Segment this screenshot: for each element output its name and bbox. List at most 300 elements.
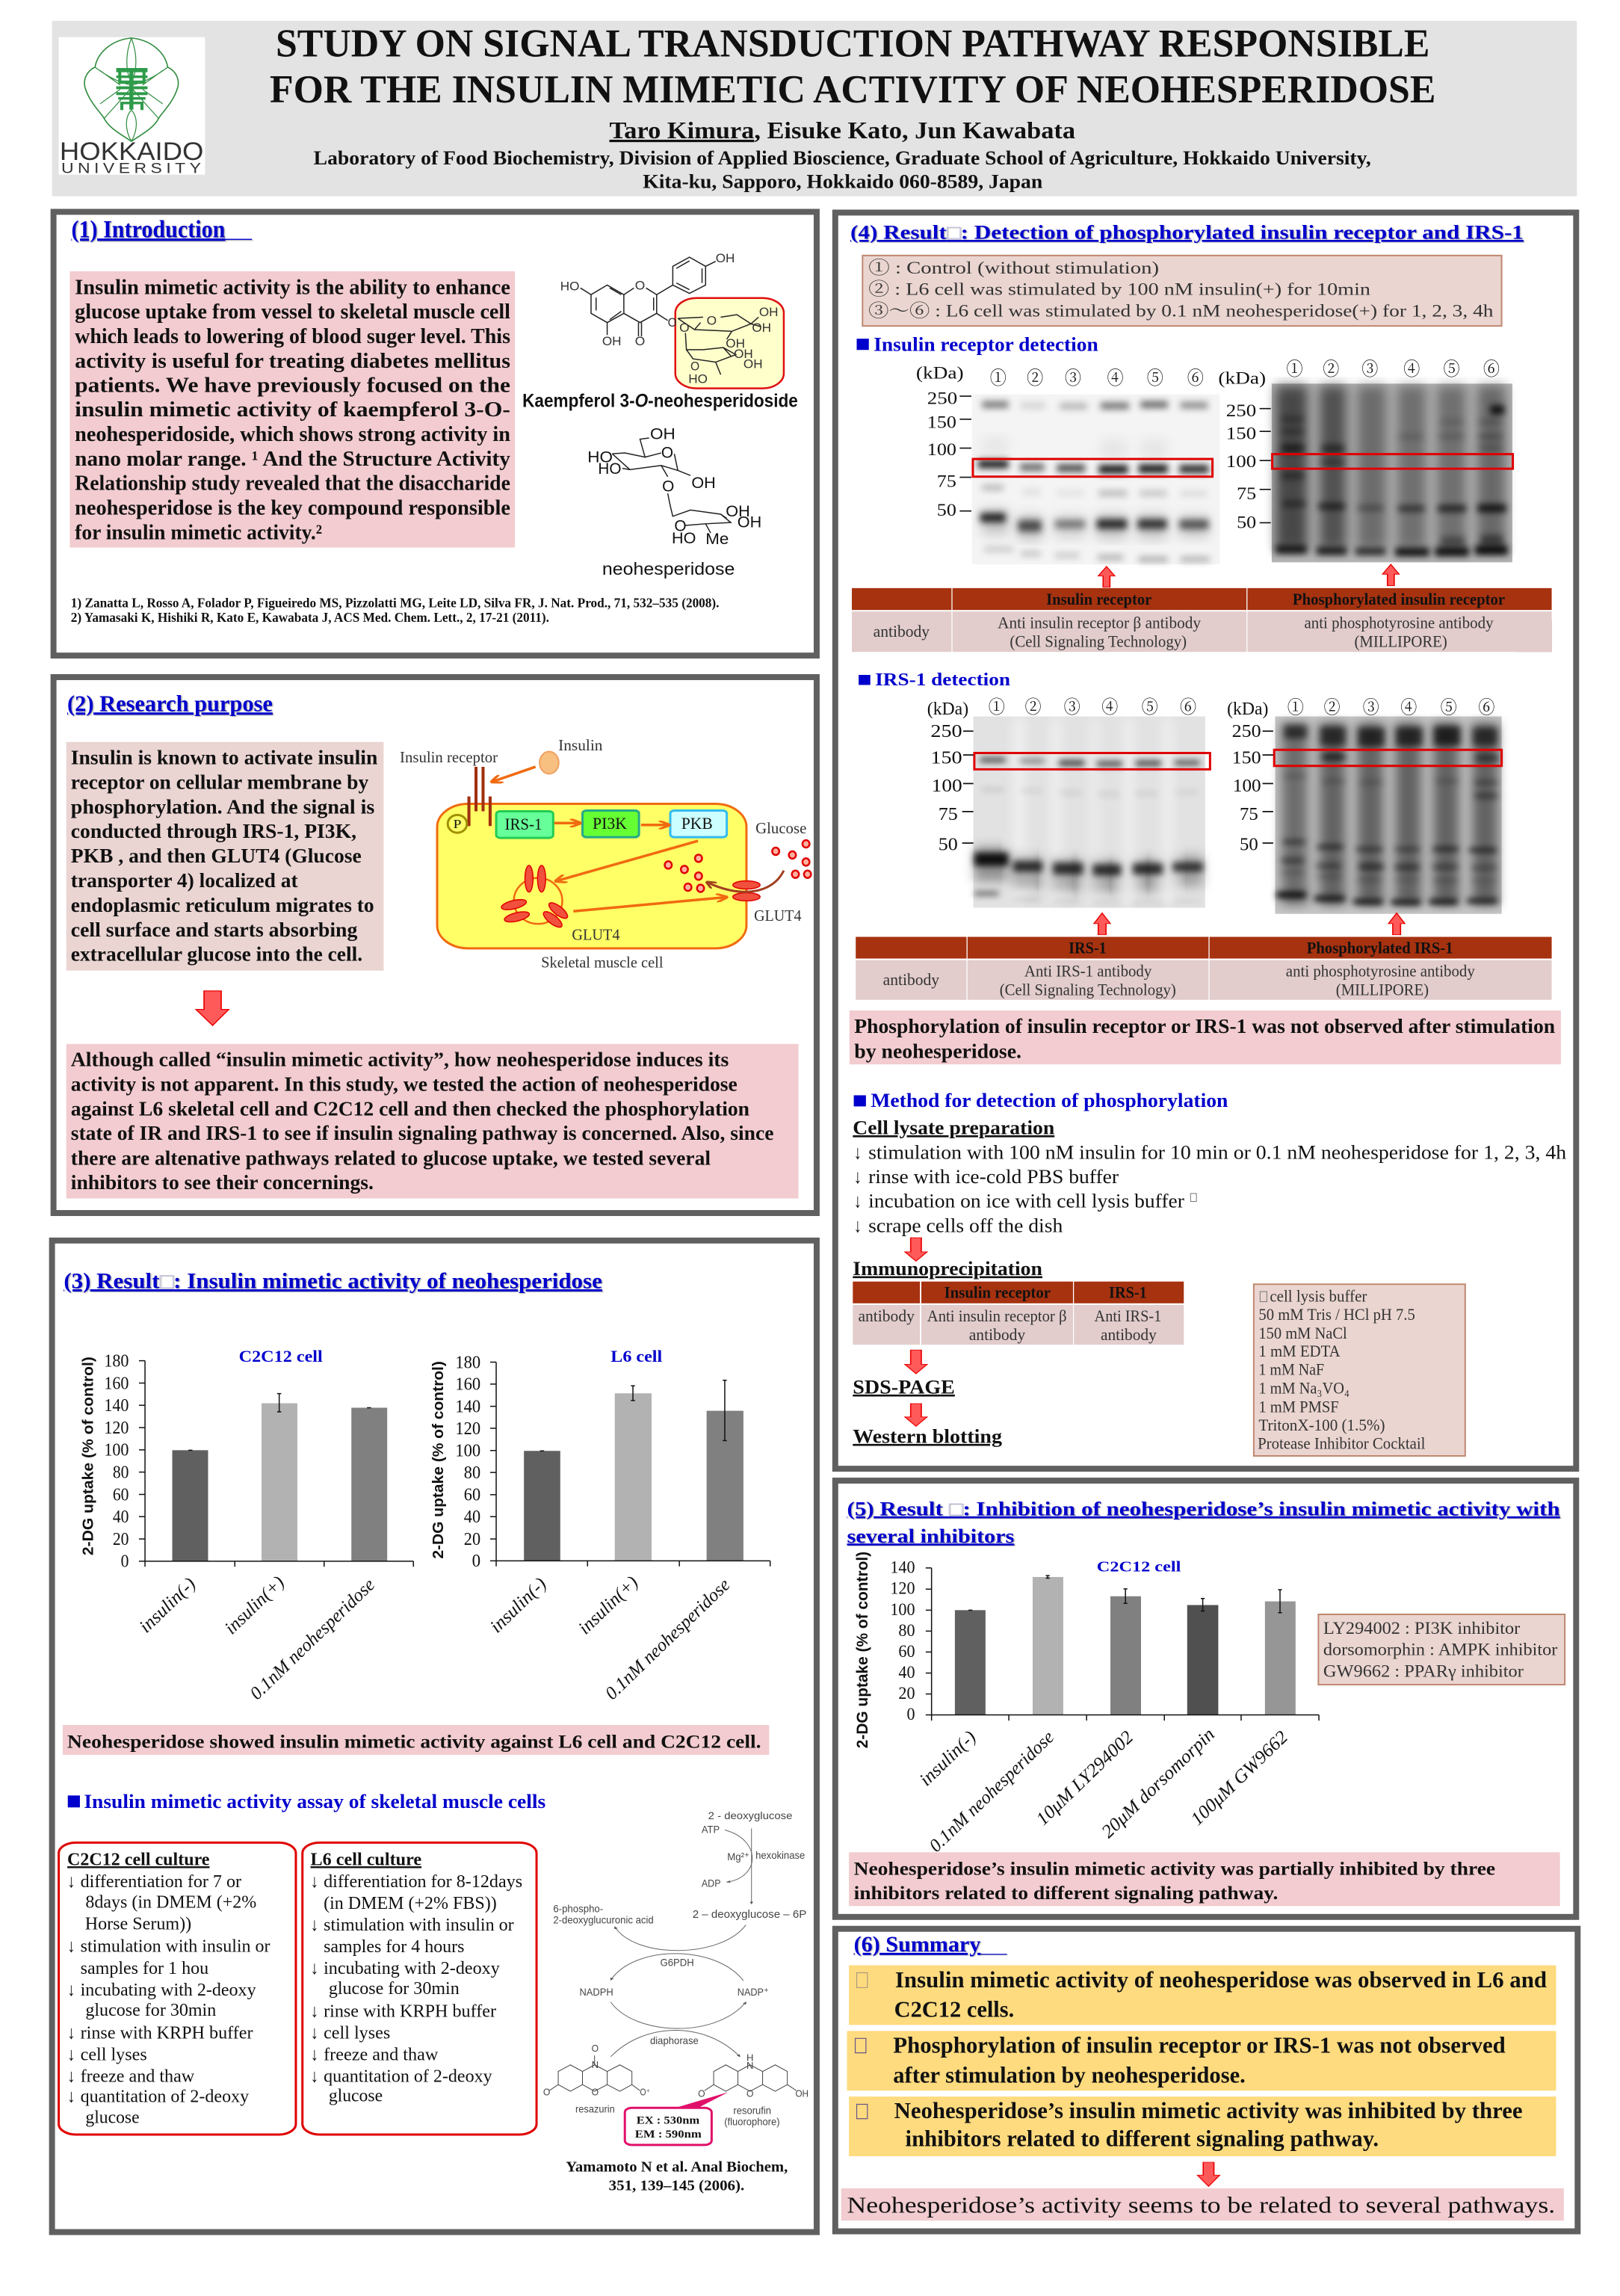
western blot: IRS-1: ② [1025,697,1042,717]
diagram: insulin signalling in skeletal muscle cell: PKB [681,815,713,833]
callout: cell lysis buffer recipe: cell lysis buffer [1270,1287,1367,1306]
western blot: IRS-1: 50 [939,834,958,854]
table: immunoprecipitation antibodies: Anti IRS-1 [1095,1307,1161,1325]
logo: Hokkaido University [59,37,205,176]
diagram: 2-DG assay enzyme cycle: 2 – deoxyglucose – 6P [693,1908,806,1921]
protocol: L6 cell culture: glucose for 30min [329,1978,460,1999]
callout: inhibitor key [1318,1614,1565,1685]
bar chart: inhibitors in C2C12 cell: 0 [906,1705,915,1723]
arrow: to conclusion [1197,2162,1219,2186]
heading: immunoprecipitation: Immunoprecipitation [853,1258,1042,1280]
arrow: up to insulin receptor column [1098,567,1115,587]
protocol: cell lysate preparation: scrape cells off the dish [868,1215,1063,1236]
bar chart: L6 cell: 2-DG uptake (% of control) [429,1361,447,1559]
table: immunoprecipitation antibodies [853,1282,1184,1345]
bar chart: C2C12 cell [79,1347,413,1704]
callout: cell lysis buffer recipe: 1 mM NaF [1258,1361,1324,1379]
text block: study aim: there are altenative pathways related to glucose uptake, we tested several [71,1147,711,1170]
text block: insulin signalling: PKB , and then GLUT4 (Glucose [71,845,362,868]
text block: insulin signalling: transporter 4) localized at [71,869,298,892]
bar chart: inhibitors in C2C12 cell: 2-DG uptake (% of control) [853,1552,871,1748]
western blot: phosphorylated IRS-1: 150 [1232,747,1261,768]
text block: study aim: against L6 skeletal cell and C2C12 cell and then checked the phosphorylation [71,1097,749,1120]
text block: introduction: glucose uptake from vessel to skeletal muscle cell [75,299,510,323]
diagram: insulin signalling in skeletal muscle cell: GLUT4 [754,908,802,925]
bar chart: C2C12 cell: 20 [113,1529,129,1549]
western blot: insulin receptor [916,362,1219,564]
protocol: C2C12 cell culture: samples for 1 hou [81,1958,208,1978]
arrow: down [196,991,229,1025]
western blot: IRS-1: (kDa) [927,698,968,719]
table: IRS-1 antibodies: Phosphorylated IRS-1 [1307,939,1453,957]
western blot: IRS-1: 250 [930,721,962,741]
chemical structure: neohesperidose: HO [672,529,696,547]
western blot: insulin receptor: 250 [927,389,957,408]
text block: introduction: neohesperidoside, which shows strong activity in [75,422,510,445]
bar chart: L6 cell: 160 [455,1374,480,1394]
western blot: phosphorylated insulin receptor: ① [1286,359,1303,380]
subheading: IRS-1 detection [859,669,1010,690]
bar chart: C2C12 cell: C2C12 cell [239,1347,323,1365]
callout: cell lysis buffer recipe: 1 mM Na₃VO₄ [1258,1380,1350,1398]
western blot: insulin receptor: (kDa) [916,362,964,383]
diagram: 2-DG assay enzyme cycle: diaphorase [650,2035,699,2047]
protocol: L6 cell culture: glucose [329,2086,383,2105]
western blot: phosphorylated IRS-1: 250 [1232,721,1261,741]
conclusion: result 3 [849,1852,1560,1906]
title: FOR THE INSULIN MIMETIC ACTIVITY OF NEOHESPERIDOSE [270,68,1435,111]
bar chart: inhibitors in C2C12 cell: 40 [898,1663,915,1682]
protocol: L6 cell culture: incubating with 2-deoxy [324,1958,500,1978]
western blot: phosphorylated IRS-1: ④ [1400,697,1417,718]
western blot: phosphorylated insulin receptor: ⑥ [1483,359,1500,380]
protocol: L6 cell culture: stimulation with insulin or [324,1915,514,1935]
bar chart: C2C12 cell: insulin(-) [135,1574,200,1637]
text block: study aim: state of IR and IRS-1 to see if insulin signaling pathway is concerned. Also, since [71,1122,773,1145]
bar chart: inhibitors in C2C12 cell: 80 [898,1621,915,1640]
western blot: insulin receptor: 50 [937,500,956,519]
western blot: phosphorylated insulin receptor: 150 [1226,424,1256,443]
callout: excitation and emission: EM : 590nm [635,2129,702,2141]
heading: SDS-PAGE: SDS-PAGE [853,1376,955,1398]
protocol: L6 cell culture: quantitation of 2-deoxy [324,2067,492,2086]
diagram: 2-DG assay enzyme cycle: H [746,2053,753,2064]
chemical structure: neohesperidose [587,425,761,548]
diagram: 2-DG assay enzyme cycle: O [592,2087,599,2097]
chemical structure: neohesperidose: OH [738,513,761,531]
panel: result 2 phosphorylation detection [835,212,1576,1469]
protocol: cell lysate preparation: rinse with ice-cold PBS buffer [868,1166,1119,1188]
bar chart: C2C12 cell: 0.1nM neohesperidose [247,1575,379,1704]
affiliation [314,146,1371,193]
protocol: C2C12 cell culture: ↓ [67,1980,75,2000]
western blot: phosphorylated insulin receptor: ④ [1403,359,1420,380]
text block: introduction: for insulin mimetic activity.² [75,519,322,544]
heading: assay [68,1791,545,1812]
table: IRS-1 antibodies: (Cell Signaling Technology) [1000,981,1176,999]
western blot: IRS-1: ⑤ [1142,697,1158,717]
conclusion: result 3: inhibitors related to different signaling pathway. [854,1882,1278,1904]
bar chart: L6 cell [429,1347,770,1704]
text block: introduction: Relationship study revealed that the disaccharide [75,471,510,495]
callout: cell lysis buffer recipe: Protease Inhibitor Cocktail [1258,1434,1425,1453]
chemical structure: kaempferol 3-O-neohesperidoside: O [668,315,677,330]
western blot: IRS-1: 150 [930,747,962,768]
protocol: L6 cell culture: ↓ [311,2045,318,2064]
western blot: IRS-1: ③ [1064,697,1080,717]
diagram: 2-DG assay enzyme cycle: Mg²⁺ [727,1851,749,1863]
bar chart: L6 cell: 0 [472,1552,480,1571]
conclusion: result 2 [850,1010,1561,1064]
diagram: 2-DG assay enzyme cycle: NADPH [579,1987,613,1999]
protocol: C2C12 cell culture: freeze and thaw [81,2067,195,2086]
callout: cell lysis buffer recipe: 150 mM NaCl [1258,1324,1347,1342]
diagram: 2-DG assay enzyme cycle: 6-phospho- [553,1904,603,1915]
protocol: C2C12 cell culture: ↓ [67,2023,75,2043]
diagram: 2-DG assay enzyme cycle: ATP [702,1824,720,1836]
panel: research purpose [54,677,817,1213]
diagram: insulin signalling in skeletal muscle cell: Insulin [558,738,603,754]
bar chart: L6 cell: 60 [464,1485,480,1505]
protocol: L6 cell culture: cell lyses [324,2023,390,2043]
text block: introduction: patients. We have previously focused on the [75,373,510,397]
logo: Hokkaido University: UNIVERSITY [61,161,201,176]
text block: introduction: which leads to lowering of blood suger level. This [75,324,510,348]
text block: insulin signalling: conducted through IRS-1, PI3K, [71,820,356,843]
bar chart: L6 cell: 180 [455,1353,480,1372]
bar chart: inhibitors in C2C12 cell: 0.1nM neohesperidose [925,1727,1058,1857]
conclusion: result 2: by neohesperidose. [854,1040,1021,1062]
protocol: C2C12 cell culture: glucose [85,2108,140,2127]
authors: Taro Kimura , Eisuke Kato, Jun Kawabata [609,117,1075,144]
chemical structure: kaempferol 3-O-neohesperidoside: OH [602,334,621,348]
bar chart: L6 cell: 20 [464,1529,480,1549]
text block: study aim: Although called “insulin mimetic activity”, how neohesperidose induces its [71,1048,729,1071]
diagram: insulin signalling in skeletal muscle cell: P [454,818,461,831]
diagram: 2-DG assay enzyme cycle: O [543,2087,550,2097]
diagram: 2-DG assay enzyme cycle: hexokinase [755,1850,805,1862]
protocol: L6 cell culture: (in DMEM (+2% FBS)) [324,1893,497,1913]
arrow: up to phosphorylated IRS-1 column [1388,913,1405,935]
callout: excitation and emission: EX : 530nm [637,2114,699,2126]
western blot: insulin receptor: ⑥ [1187,368,1204,389]
western blot: phosphorylated insulin receptor: ③ [1361,359,1378,380]
bar chart: inhibitors in C2C12 cell: insulin(-) [916,1727,980,1790]
diagram: insulin signalling in skeletal muscle cell: PI3K [593,815,627,833]
heading: introduction: (1) Introduction [71,216,225,243]
diagram: 2-DG assay enzyme cycle: G6PDH [660,1957,694,1969]
affiliation: Kita-ku, Sapporo, Hokkaido 060-8589, Japan [643,170,1042,193]
chemical structure: kaempferol 3-O-neohesperidoside: O [635,334,645,348]
legend: sample conditions: ① : Control (without stimulation) [868,258,1159,277]
chemical structure: kaempferol 3-O-neohesperidoside: HO [560,279,579,293]
title: STUDY ON SIGNAL TRANSDUCTION PATHWAY RESPONSIBLE [276,22,1429,66]
protocol: C2C12 cell culture: cell lyses [81,2045,147,2064]
western blot: phosphorylated IRS-1: 100 [1233,775,1261,795]
citation: Yamamoto N et al. Anal Biochem, [566,2158,788,2175]
table: immunoprecipitation antibodies: antibody [969,1326,1026,1344]
western blot: phosphorylated IRS-1: ③ [1363,697,1379,718]
heading: result 3 [847,1499,1560,1547]
bar chart: L6 cell: L6 cell [610,1347,662,1365]
bar chart: L6 cell: 40 [464,1507,480,1527]
western blot: phosphorylated IRS-1 [1227,697,1502,914]
western blot: phosphorylated insulin receptor: 250 [1226,401,1256,420]
bar chart: inhibitors in C2C12 cell: 60 [898,1642,915,1661]
bar chart: C2C12 cell: 2-DG uptake (% of control) [79,1357,96,1555]
heading: western blotting: Western blotting [853,1426,1002,1448]
callout: excitation and emission [625,2092,729,2145]
panel: result 3 inhibitors [835,1481,1576,1917]
subheading: IRS-1 detection: IRS-1 detection [875,669,1010,690]
text block: introduction: activity is useful for treating diabetes mellitus [75,348,510,372]
protocol: cell lysate preparation: ↓ [854,1166,862,1188]
table: insulin receptor antibodies: Anti insulin receptor β antibody [998,614,1201,632]
bar chart: C2C12 cell: 120 [104,1418,129,1437]
protocol: C2C12 cell culture: ↓ [67,2067,75,2086]
protocol: L6 cell culture: differentiation for 8-12days [324,1871,522,1892]
bar chart: L6 cell: 100 [455,1441,480,1460]
text block: insulin signalling: endoplasmic reticulum migrates to [71,894,374,916]
callout: cell lysis buffer recipe [1254,1284,1465,1456]
protocol: C2C12 cell culture: glucose for 30min [85,2000,216,2020]
text block: insulin signalling: Insulin is known to activate insulin [71,746,377,769]
bar chart: C2C12 cell: 80 [113,1463,129,1482]
affiliation: Laboratory of Food Biochemistry, Division of Applied Bioscience, Graduate School of Agriculture, Hokkaido University, [314,146,1371,169]
citation: 351, 139–145 (2006). [609,2176,744,2194]
table: immunoprecipitation antibodies: IRS-1 [1109,1284,1147,1302]
western blot: phosphorylated IRS-1: ② [1324,697,1341,718]
legend: sample conditions: ② : L6 cell was stimulated by 100 nM insulin(+) for 10min [868,280,1370,299]
heading: result 3: several inhibitors [847,1525,1014,1547]
western blot: phosphorylated insulin receptor: ② [1323,359,1339,380]
text block: study aim: inhibitors to see their concernings. [71,1171,374,1194]
diagram: 2-DG assay enzyme cycle: O [746,2088,753,2099]
subheading: insulin receptor detection: Insulin receptor detection [874,333,1098,355]
title [270,22,1435,111]
callout: cell lysis buffer recipe: TritonX-100 (1.5%) [1258,1416,1385,1435]
bar chart: inhibitors in C2C12 cell: 20 [898,1684,915,1703]
diagram: 2-DG assay enzyme cycle: resorufin [733,2105,771,2117]
bar chart: C2C12 cell: insulin(+) [221,1573,288,1638]
table: insulin receptor antibodies [852,588,1552,652]
chemical structure: kaempferol 3-O-neohesperidoside: O [690,359,699,373]
diagram: 2-DG assay enzyme cycle: OH [795,2088,809,2099]
bar chart: inhibitors in C2C12 cell: 140 [890,1558,915,1576]
diagram: 2-DG assay enzyme cycle: 2 - deoxyglucose [708,1810,792,1822]
panel: introduction [54,212,817,655]
western blot: phosphorylated insulin receptor: ⑤ [1444,359,1460,380]
table: insulin receptor antibodies: antibody [874,623,930,641]
protocol: L6 cell culture: samples for 4 hours [324,1937,464,1957]
text block: study aim: activity is not apparent. In this study, we tested the action of neohesperidose [71,1073,738,1096]
chemical structure: neohesperidose: OH [691,474,716,491]
summary point 1: C2C12 cells. [894,1997,1014,2022]
bar chart: L6 cell: 140 [455,1397,480,1416]
protocol: C2C12 cell culture: 8days (in DMEM (+2% [85,1892,256,1912]
diagram: 2-DG assay enzyme cycle: resazurin [575,2104,615,2115]
table: insulin receptor antibodies: Insulin receptor [1046,590,1151,608]
western blot: IRS-1: ⑥ [1180,697,1196,717]
summary point 2 [847,2031,1556,2090]
bar chart: C2C12 cell: 160 [104,1374,129,1393]
protocol: cell lysate preparation: ↓ [854,1141,862,1163]
protocol: C2C12 cell culture: Horse Serum)) [85,1913,191,1934]
bar chart: L6 cell: insulin(+) [575,1573,642,1638]
western blot: phosphorylated insulin receptor [1218,359,1513,562]
diagram: insulin signalling in skeletal muscle cell: Skeletal muscle cell [541,954,664,972]
diagram: insulin signalling in skeletal muscle cell: IRS-1 [505,815,542,833]
protocol: L6 cell culture: ↓ [311,2023,318,2043]
summary point 1 [849,1966,1556,2025]
summary point 3 [849,2096,1556,2156]
diagram: 2-DG assay enzyme cycle: 2-deoxyglucuronic acid [553,1914,654,1925]
bar chart: inhibitors in C2C12 cell: 20μM dorsomorpin [1098,1724,1219,1842]
chemical structure: neohesperidose: O [662,477,674,495]
callout: cell lysis buffer recipe: 1 mM EDTA [1258,1342,1341,1361]
label: kaempferol: Kaempferol 3-O-neohesperidoside [522,390,798,411]
chemical structure: kaempferol 3-O-neohesperidoside [560,250,784,389]
bar chart: inhibitors in C2C12 cell: 10μM LY294002 [1033,1727,1137,1830]
western blot: IRS-1: ① [989,697,1005,717]
callout: cell lysis buffer recipe: 1 mM PMSF [1258,1398,1339,1416]
chemical structure: neohesperidose: O [661,444,673,461]
table: IRS-1 antibodies: Anti IRS-1 antibody [1024,963,1152,981]
diagram: 2-DG assay enzyme cycle: O⁺ [640,2087,650,2097]
diagram: insulin signalling in skeletal muscle cell: Insulin receptor [400,749,498,766]
chemical structure: neohesperidose: Me [705,530,729,548]
bar chart: L6 cell: 80 [464,1463,480,1482]
subheading: insulin receptor detection [857,333,1098,355]
western blot: phosphorylated IRS-1: 75 [1240,803,1258,824]
bar chart: inhibitors in C2C12 cell: C2C12 cell [1097,1558,1181,1575]
chemical structure: kaempferol 3-O-neohesperidoside: O [679,321,690,334]
western blot: IRS-1: ④ [1101,697,1118,717]
protocol: L6 cell culture: ↓ [311,1958,318,1978]
table: immunoprecipitation antibodies: Anti insulin receptor β [927,1307,1066,1325]
protocol: C2C12 cell culture: rinse with KRPH buffer [81,2023,253,2043]
chemical structure: kaempferol 3-O-neohesperidoside: O [707,313,717,327]
protocol: C2C12 cell culture: incubating with 2-deoxy [81,1980,256,2000]
chemical structure: kaempferol 3-O-neohesperidoside: OH [726,336,745,351]
western blot: phosphorylated IRS-1: 50 [1240,834,1258,854]
western blot: IRS-1 [927,697,1210,908]
bar chart: inhibitors in C2C12 cell: 120 [890,1579,915,1598]
protocol: L6 cell culture: L6 cell culture [311,1850,421,1870]
protocol: L6 cell culture: ↓ [311,1915,318,1935]
protocol: C2C12 cell culture: ↓ [67,1937,75,1956]
diagram: insulin signalling in skeletal muscle cell: GLUT4 [572,927,620,943]
protocol: C2C12 cell culture: ↓ [67,2045,75,2064]
table: IRS-1 antibodies: antibody [883,971,940,989]
references [71,596,719,625]
heading: research purpose: (2) Research purpose [67,691,273,716]
chemical structure: kaempferol 3-O-neohesperidoside: OH [716,250,735,265]
western blot: insulin receptor: 100 [927,439,956,459]
table: immunoprecipitation antibodies: antibody [1101,1326,1157,1344]
text block: introduction: neohesperidose is the key compound responsible [75,495,510,519]
western blot: insulin receptor: ④ [1107,368,1124,389]
chemical structure: kaempferol 3-O-neohesperidoside: O [635,278,645,292]
western blot: insulin receptor: ② [1027,368,1043,389]
western blot: insulin receptor: 75 [937,472,956,491]
diagram: 2-DG assay enzyme cycle: N [746,2061,753,2071]
western blot: phosphorylated insulin receptor: 75 [1237,484,1256,503]
western blot: insulin receptor: ③ [1065,368,1081,389]
protocol: C2C12 cell culture: ↓ [67,2086,75,2106]
chemical structure: neohesperidose: HO [598,460,621,477]
western blot: IRS-1: 75 [939,803,958,824]
western blot: phosphorylated IRS-1: (kDa) [1227,698,1268,719]
legend: sample conditions [862,256,1502,326]
protocol: L6 cell culture: ↓ [311,1871,318,1892]
summary point 2: after stimulation by neohesperidose. [893,2063,1246,2088]
subheading: method [854,1090,1228,1111]
protocol: L6 cell culture [303,1842,537,2135]
protocol: L6 cell culture: freeze and thaw [324,2045,439,2064]
western blot: phosphorylated insulin receptor: (kDa) [1218,368,1266,388]
references: 1) Zanatta L, Rosso A, Folador P, Figueiredo MS, Pizzolatti MG, Leite LD, Silva FR, J. Nat. Prod., 71, 532–535 (2008). [71,596,719,611]
arrow: to SDS-PAGE [905,1350,927,1374]
diagram: 2-DG assay enzyme cycle: ADP [702,1878,721,1889]
bar chart: C2C12 cell: 140 [104,1395,129,1416]
diagram: insulin signalling in skeletal muscle cell [400,738,811,972]
western blot: IRS-1: 100 [932,775,962,795]
protocol: L6 cell culture: rinse with KRPH buffer [324,2002,496,2021]
bar chart: L6 cell: 120 [455,1419,480,1438]
bar chart: C2C12 cell: 180 [104,1351,129,1371]
heading: assay: Insulin mimetic activity assay of skeletal muscle cells [84,1791,545,1812]
citation [566,2158,788,2194]
protocol: cell lysate preparation: Cell lysate preparation [853,1117,1054,1139]
diagram: 2-DG assay enzyme cycle: (fluorophore) [724,2116,780,2128]
chemical structure: kaempferol 3-O-neohesperidoside: OH [743,357,763,371]
western blot: phosphorylated insulin receptor: 50 [1237,512,1256,532]
protocol: C2C12 cell culture: stimulation with insulin or [81,1937,270,1956]
chemical structure: neohesperidose: OH [650,425,675,442]
diagram: 2-DG assay enzyme cycle [543,1810,809,2128]
text block: insulin signalling: phosphorylation. And the signal is [71,795,374,818]
heading: result 1: (3) Result□: Insulin mimetic activity of neohesperidose [64,1268,602,1294]
bar chart: inhibitors in C2C12 cell: 100 [890,1600,915,1619]
protocol: cell lysate preparation: ↓ [854,1215,862,1236]
table: insulin receptor antibodies: (Cell Signaling Technology) [1010,633,1187,651]
table: IRS-1 antibodies: (MILLIPORE) [1336,981,1429,999]
protocol: C2C12 cell culture [59,1842,296,2135]
western blot: insulin receptor: 150 [927,412,956,432]
diagram: 2-DG assay enzyme cycle: N [592,2060,599,2070]
bar chart: L6 cell: 0.1nM neohesperidose [602,1575,734,1704]
panel: result 1 insulin mimetic activity [52,1241,817,2232]
text block: study aim [67,1044,799,1199]
table: immunoprecipitation antibodies: Insulin receptor [945,1284,1051,1302]
bar chart: inhibitors in C2C12 cell [853,1552,1319,1857]
protocol: C2C12 cell culture: quantitation of 2-deoxy [81,2086,250,2106]
chemical structure: neohesperidose: O [674,516,687,534]
table: IRS-1 antibodies: IRS-1 [1069,939,1107,957]
logo: Hokkaido University: HOKKAIDO [60,138,203,166]
bar chart: C2C12 cell: 60 [113,1485,129,1505]
chemical structure: kaempferol 3-O-neohesperidoside: OH [759,305,779,319]
bar chart: inhibitors in C2C12 cell: 100μM GW9662 [1187,1727,1292,1830]
table: insulin receptor antibodies: anti phosphotyrosine antibody [1305,614,1494,632]
chemical structure: kaempferol 3-O-neohesperidoside: HO [688,371,708,386]
western blot: phosphorylated IRS-1: ① [1287,697,1304,718]
diagram: 2-DG assay enzyme cycle: O [592,2043,599,2054]
text block: introduction: nano molar range. ¹ And the Structure Activity [75,446,510,470]
text block: introduction: Insulin mimetic activity is the ability to enhance [75,275,510,299]
protocol: cell lysate preparation: ↓ [854,1191,862,1212]
